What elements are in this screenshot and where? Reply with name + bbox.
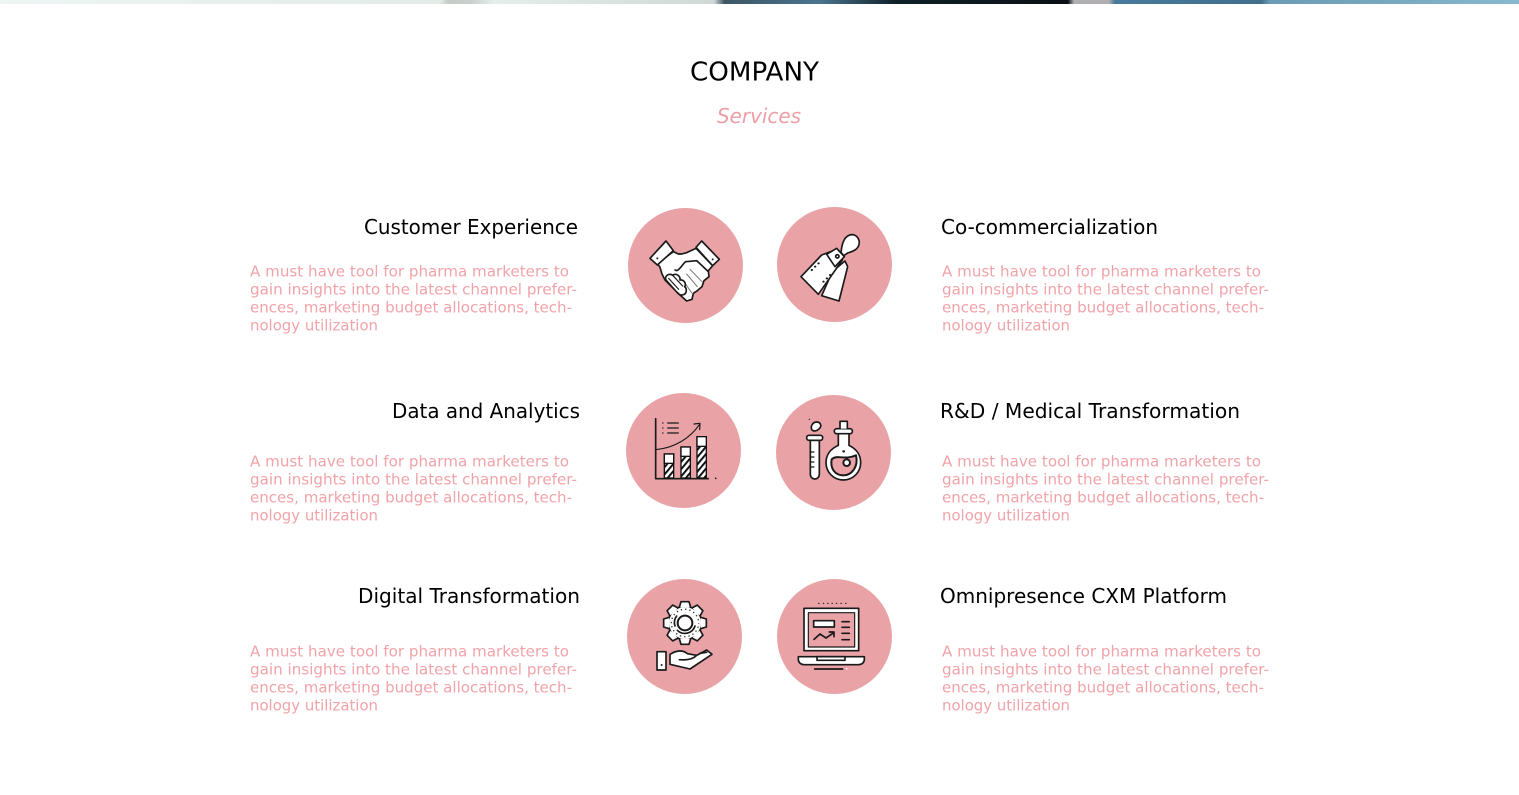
heading: customer experience: Customer Experience xyxy=(364,215,578,239)
text block: omnipresence cxm platform xyxy=(942,642,1269,714)
text block: customer experience: gain insights into the latest channel prefer- xyxy=(250,280,577,298)
text block: co-commercialization: A must have tool for pharma marketers to xyxy=(942,262,1261,280)
text block: data and analytics: gain insights into the latest channel prefer- xyxy=(250,470,577,488)
heading: data and analytics: Data and Analytics xyxy=(392,399,580,423)
icon: flask and test tube xyxy=(776,395,891,510)
heading: r&d / medical transformation: R&D / Medical Transformation xyxy=(940,399,1240,423)
text block: r&d / medical transformation: nology utilization xyxy=(942,506,1070,524)
icon: laptop dashboard xyxy=(777,579,892,694)
text block: omnipresence cxm platform: nology utilization xyxy=(942,696,1070,714)
subtitle: Services xyxy=(717,104,801,128)
text block: data and analytics: ences, marketing budget allocations, tech- xyxy=(250,488,572,506)
panel: data and analytics xyxy=(250,399,580,524)
icon: gear on hand xyxy=(627,579,742,694)
icon: handshake xyxy=(628,208,743,323)
text block: customer experience: ences, marketing budget allocations, tech- xyxy=(250,298,572,316)
panel: r&d / medical transformation xyxy=(940,399,1269,524)
text block: r&d / medical transformation xyxy=(942,452,1269,524)
text block: digital transformation: A must have tool for pharma marketers to xyxy=(250,642,569,660)
text block: customer experience: A must have tool for pharma marketers to xyxy=(250,262,569,280)
text block: customer experience: nology utilization xyxy=(250,316,378,334)
panel: omnipresence cxm platform xyxy=(940,584,1269,714)
text block: digital transformation: gain insights into the latest channel prefer- xyxy=(250,660,577,678)
text block: r&d / medical transformation: ences, marketing budget allocations, tech- xyxy=(942,488,1264,506)
title: COMPANY xyxy=(690,58,819,88)
text block: co-commercialization: gain insights into the latest channel prefer- xyxy=(942,280,1269,298)
text block: data and analytics xyxy=(250,452,577,524)
text block: co-commercialization: ences, marketing budget allocations, tech- xyxy=(942,298,1264,316)
icon: price tags xyxy=(777,207,892,322)
text block: digital transformation: ences, marketing budget allocations, tech- xyxy=(250,678,572,696)
text block: data and analytics: A must have tool for pharma marketers to xyxy=(250,452,569,470)
text block: data and analytics: nology utilization xyxy=(250,506,378,524)
icon: bar chart xyxy=(626,393,741,508)
text block: omnipresence cxm platform: A must have tool for pharma marketers to xyxy=(942,642,1261,660)
text block: digital transformation: nology utilization xyxy=(250,696,378,714)
panel: co-commercialization xyxy=(941,215,1269,334)
panel: customer experience xyxy=(250,215,578,334)
text block: r&d / medical transformation: gain insights into the latest channel prefer- xyxy=(942,470,1269,488)
heading: digital transformation: Digital Transformation xyxy=(358,584,580,608)
panel: digital transformation xyxy=(250,584,580,714)
text block: digital transformation xyxy=(250,642,577,714)
heading: omnipresence cxm platform: Omnipresence CXM Platform xyxy=(940,584,1227,608)
text block: omnipresence cxm platform: gain insights into the latest channel prefer- xyxy=(942,660,1269,678)
text block: co-commercialization: nology utilization xyxy=(942,316,1070,334)
text block: r&d / medical transformation: A must have tool for pharma marketers to xyxy=(942,452,1261,470)
text block: omnipresence cxm platform: ences, marketing budget allocations, tech- xyxy=(942,678,1264,696)
heading: co-commercialization: Co-commercialization xyxy=(941,215,1158,239)
text block: customer experience xyxy=(250,262,577,334)
text block: co-commercialization xyxy=(942,262,1269,334)
top photo strip xyxy=(0,0,1519,4)
